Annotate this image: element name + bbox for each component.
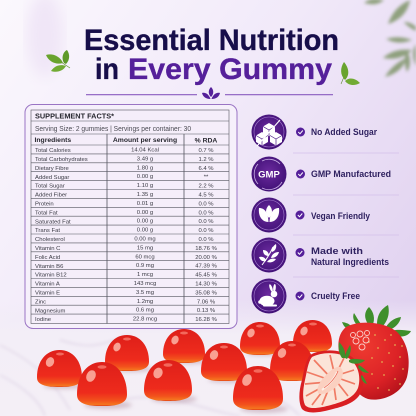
gummy 6 [201,343,247,381]
table rows: 0.00 mg [134,236,156,242]
label: Natural Ingredients [311,257,389,267]
glossy highlight [350,330,370,350]
table rows: 0.00 g [137,174,153,180]
table rows: 1.2mg [137,299,153,305]
icon: GMP badge: GMP [258,170,280,180]
table rows: Vitamin B12 [35,273,67,279]
column headers [34,137,217,144]
gummy 1 [37,350,82,387]
table rows: Cholesterol [35,237,65,243]
table rows: 15 mg [137,245,153,251]
title: Essential Nutrition [84,24,339,57]
table rows: 2.2 % [198,184,214,190]
feature: natural ingredients [252,238,389,272]
table rows: 18.76 % [195,246,218,252]
icon: leaves [252,198,286,232]
table rows: Added Fiber [35,193,67,199]
table rows: 1.10 g [137,183,153,189]
check [296,248,304,257]
table rows: Vitamin B6 [35,264,64,270]
table rows: Total Carbohydrates [35,157,88,163]
table rows: Vitamin C [35,246,61,252]
feature: cruelty free [252,278,360,314]
panel: supplement facts [25,104,237,328]
gummy 8 [240,322,280,355]
column headers: % RDA [195,137,217,144]
serving info: Serving Size: 2 gummies | Servings per container: 30 [35,126,191,133]
table rows: 14.30 % [195,282,218,288]
table rows: Protein [35,202,54,208]
icon: sugar cubes [252,114,286,150]
icon: left leaves [46,50,70,72]
column headers: Amount per serving [113,137,177,144]
table rows: 45.45 % [195,273,218,279]
half strawberry [299,342,369,412]
table rows: 0.00 g [137,210,153,216]
table rows: 1.2 % [198,157,214,163]
column headers: Ingredients [34,137,71,144]
table rows: Magnesium [35,308,66,314]
gummy 3 [105,335,149,371]
icon: rabbit [252,278,286,314]
table rows: 0.13 % [197,308,216,314]
table rows: Iodine [35,317,52,323]
title [84,24,339,86]
check [296,210,304,220]
table rows: Zinc [35,299,46,305]
label: Cruelty Free [311,291,360,301]
table rows: Vitamin E [35,290,60,296]
table rows: Trans Fat [35,228,60,234]
label [311,246,389,267]
check [296,128,305,136]
table rows: Dietary Fibre [35,166,69,172]
feature dividers [293,153,399,277]
table rows: Folic Acid [35,255,60,261]
whole strawberry [338,305,411,400]
table rows: 0.01 g [137,201,153,207]
gummy 9 [270,341,314,381]
table heading: SUPPLEMENT FACTS* [35,112,114,120]
table rows: 3.49 g [137,156,153,162]
table rows: 47.39 % [195,264,218,270]
table rows: 20.00 % [195,255,218,261]
title: Every Gummy [128,53,332,86]
table rows: 35.08 % [195,290,218,296]
gummy 7 [233,366,283,410]
label: Vegan Friendly [311,211,370,221]
table rows: Total Sugar [35,184,65,190]
table rows: 0.6 mg [136,308,154,314]
table rows [35,148,218,323]
gummy 2 [77,362,127,406]
feature: gmp [252,156,391,192]
feature: vegan [252,198,370,232]
table rows: 0.0 % [198,210,214,216]
check [296,170,305,178]
table rows: 0.0 % [198,201,214,207]
table rows: 0.0 % [198,219,214,225]
label: GMP Manufactured [311,169,391,179]
table grid [31,110,229,324]
title: in [95,53,119,86]
gummy 5 [163,329,205,363]
table rows: 0.00 g [137,228,153,234]
table rows: 1.80 g [137,165,153,171]
table rows: 1 mcg [137,272,153,278]
table rows: 3.5 mg [136,290,154,296]
table rows: Total Fat [35,210,58,216]
table rows: 0.7 % [198,148,214,154]
label: No Added Sugar [311,127,378,137]
blurred foliage top right [364,0,416,77]
gummies [37,320,332,413]
label: Made with [311,246,363,256]
gummy 10 [293,320,332,352]
feature: no added sugar [252,114,378,150]
table rows: 60 mcg [135,254,155,260]
check [296,292,304,300]
divider with lotus [86,87,333,99]
table rows: 0.00 g [137,219,153,225]
flesh streaks [305,355,355,405]
table rows: 1.35 g [137,192,153,198]
table rows: 0.0 % [198,237,214,243]
table rows: 22.8 mcg [133,317,157,323]
table rows: 4.5 % [198,192,214,198]
icon: right leaves [341,62,360,85]
table rows: 14.04 Kcal [131,148,159,154]
table rows: Total Calories [35,148,71,154]
table rows: 6.4 % [198,166,214,172]
table rows: Added Sugar [35,175,69,181]
table rows: Saturated Fat [35,219,71,225]
table rows: 0.9 mg [136,263,154,269]
table rows: ** [204,175,209,181]
gummy 4 [144,360,192,401]
table rows: 143 mcg [134,281,156,287]
table rows: Vitamin A [35,282,60,288]
table rows: 7.06 % [197,299,216,305]
table rows: 16.28 % [195,317,218,323]
table rows: 0.0 % [198,228,214,234]
icon: sprig [252,238,286,272]
